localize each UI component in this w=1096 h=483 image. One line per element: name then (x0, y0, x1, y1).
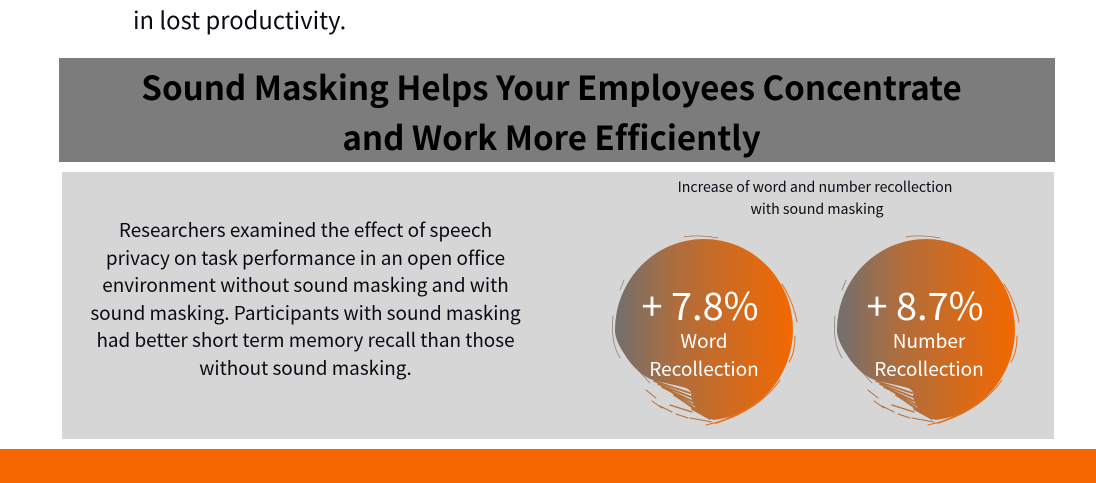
word label (649, 327, 759, 382)
heading line one: Sound Masking Helps Your Employees Concentrate (141, 62, 962, 110)
number percent: + 8.7% (866, 276, 984, 331)
word recollection circle (612, 236, 797, 425)
bottom orange bar (0, 449, 1096, 483)
body paragraph: Researchers examined the effect of speech (119, 216, 492, 243)
body paragraph: environment without sound masking and with (102, 271, 509, 298)
number label: Number (893, 327, 965, 354)
intro text fragment: in lost productivity. (133, 1, 346, 36)
body paragraph (90, 216, 521, 381)
content panel (62, 172, 1054, 439)
body paragraph: sound masking. Participants with sound masking (90, 299, 521, 326)
word label: Recollection (649, 355, 759, 382)
word stat (641, 276, 759, 382)
chart caption: with sound masking (750, 199, 884, 219)
number label: Recollection (874, 355, 984, 382)
number stat (866, 276, 984, 382)
body paragraph: had better short term memory recall than those (96, 326, 515, 353)
heading banner (59, 58, 1055, 162)
body paragraph: without sound masking. (199, 354, 412, 381)
body paragraph: privacy on task performance in an open office (106, 244, 505, 271)
word label: Word (680, 327, 728, 354)
heading line two: and Work More Efficiently (342, 112, 761, 160)
chart caption (678, 177, 952, 219)
chart caption: Increase of word and number recollection (678, 177, 952, 197)
number recollection circle (834, 236, 1019, 425)
word percent: + 7.8% (641, 276, 758, 331)
number label (874, 327, 984, 382)
